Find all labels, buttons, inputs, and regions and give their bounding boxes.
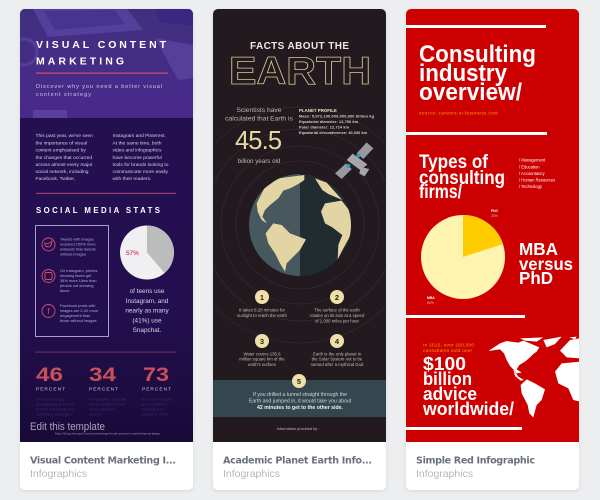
fact 5 band: 42 minutes to get to the other side. [257, 405, 343, 411]
age text: billion years old [238, 158, 281, 165]
fact 5 band: Earth and jumped in, it would take you about [249, 398, 352, 404]
stat text: twitter: without images [60, 252, 86, 256]
stat: 34 percent: PERCENT [89, 386, 118, 392]
intro text column 2: At the same time, both [112, 140, 162, 146]
stat: 46 percent [36, 364, 74, 416]
world map [488, 337, 580, 417]
fact 4: 4 [335, 337, 340, 346]
list of firm types: / Accountancy [519, 171, 545, 176]
stat text: facebook: images are 2.3X more [60, 308, 98, 313]
fact 3: million square km of the [239, 356, 285, 362]
stat: 34 percent [89, 364, 126, 416]
heading: types of consulting firms: firms/ [419, 181, 462, 203]
fact 3: earth's surface [248, 362, 277, 367]
stat text: facebook [60, 303, 98, 323]
pie chart: MBA versus PhD: 80% [427, 301, 434, 305]
pie caption: (41%) use [132, 318, 162, 324]
fact 1: sunlight to reach the earth [237, 313, 287, 318]
heading: visual content marketing: VISUAL CONTENT [36, 39, 167, 51]
heading: visual content marketing [36, 41, 166, 64]
heading: facts about the: FACTS ABOUT THE [250, 41, 349, 52]
heading: 100 billion advice worldwide: advice [423, 384, 477, 404]
heading: 100 billion advice worldwide: worldwide/ [422, 399, 514, 419]
list of firm types: / Management [519, 158, 546, 162]
fact 4: the Solar System not to be [312, 356, 363, 362]
panel: red infographic preview [406, 9, 580, 442]
planet profile: Polar diameter: 12,714 km [299, 126, 350, 130]
stat: 46 percent: PERCENT [36, 386, 65, 392]
stat: 34 percent: visual assets as their [89, 402, 126, 406]
fact 2: rotates on its axis at a speed [310, 313, 365, 318]
intro text column 1: Facebook, Twitter, [36, 176, 75, 182]
heading: types of consulting firms: Types of [419, 151, 488, 173]
icon: instagram [42, 270, 55, 282]
heading: consulting industry overview: Consulting [419, 41, 536, 68]
stat text: instagram: On Instagram, photos [60, 268, 97, 273]
subtitle: Discover why you need a better visual [36, 84, 162, 90]
planet profile: Equatorial diameter: 12,756 km [299, 120, 359, 124]
heading: social media stats: SOCIAL MEDIA STATS [36, 206, 160, 215]
intro text column 1: the changes that occurred [36, 155, 92, 161]
fact 2: of 1,000 miles per hour [315, 318, 360, 324]
stat text: instagram: showing faces get [60, 273, 92, 278]
card title: Academic Planet Earth Info... [223, 456, 372, 466]
panel: stats box [36, 226, 108, 336]
stat: 73 percent: PERCENT [142, 386, 171, 392]
intro text column 2: have become powerful [112, 155, 162, 161]
stat: 73 percent: 73 [143, 364, 169, 386]
source: source: careers-in-business.com [419, 110, 498, 116]
planet profile: Equatorial circumference: 40,030 km [299, 131, 368, 135]
heading: 100 billion advice worldwide: billion [423, 369, 472, 389]
card category: Infographics [416, 468, 473, 480]
stat: 46 percent: photography is critical [36, 402, 74, 406]
icon: facebook: f [47, 307, 50, 316]
stat text: instagram: 38% more Likes than [60, 278, 97, 283]
card title: Visual Content Marketing I... [30, 456, 176, 466]
panel: purple infographic preview [11, 9, 193, 442]
stat: 73 percent: content in 2016 [141, 412, 168, 416]
pie chart: MBA versus PhD: PhD [491, 209, 498, 213]
stat text: instagram [60, 268, 97, 293]
information credit: Information provided by : [277, 426, 319, 431]
pie chart: MBA versus PhD: 20% [491, 214, 498, 218]
stat text: twitter [60, 236, 96, 256]
fact 1: It takes 8.20 minutes for [239, 308, 285, 312]
planet profile: PLANET PROFILE [299, 108, 337, 113]
stat: 46 percent: to their marketing and [36, 406, 74, 412]
list of firm types: / Technology [519, 184, 543, 189]
heading: MBA versus PhD: versus [519, 254, 573, 274]
stat: 73 percent: aim to prioritize [141, 402, 167, 406]
intro text column 2: video and infographics [112, 148, 162, 154]
panel: dark infographic preview [213, 9, 386, 442]
pie chart: 57 percent [120, 226, 174, 280]
advice lead text: In 2015, over 200,000 [423, 342, 474, 348]
stat: 34 percent: content [89, 412, 103, 416]
fact 5 band [213, 374, 386, 417]
fact 2: The surface of the earth [314, 308, 360, 312]
card: Visual Content Marketing [11, 9, 193, 490]
intro text column 2: communicate more easily [112, 169, 169, 175]
heading: visual content marketing: MARKETING [36, 56, 124, 68]
heading: types of consulting firms: consulting [419, 167, 505, 189]
heading: MBA versus PhD [519, 239, 573, 288]
planet profile [299, 108, 375, 135]
stat: 46 percent: 46 [36, 364, 63, 386]
fact 3 [239, 334, 285, 367]
age text: calculated that Earth is [225, 116, 293, 122]
stat text: facebook: those without images [60, 318, 97, 323]
intro text column 1: content emphasised by [36, 148, 86, 154]
stat: 46 percent: consulting strategies [36, 412, 72, 416]
pie caption: of teens use [130, 288, 165, 295]
intro text column 2: Instagram and Pinterest. [112, 133, 166, 139]
edit overlay text: Edit this template [30, 421, 105, 433]
age text: Scientists have [237, 107, 282, 114]
header photo background [11, 9, 193, 118]
pie caption: Snapchat. [133, 327, 162, 334]
icon: satellite [335, 142, 373, 179]
fact 4: Earth is the only planet in [313, 352, 362, 356]
stat: 34 percent: most important [89, 406, 116, 412]
fact 3: Water covers 135.6 [243, 352, 281, 356]
stat text: instagram: photos not showing [60, 283, 94, 288]
stat: 73 percent: creating more [141, 406, 165, 412]
pie caption [125, 288, 169, 334]
pie chart: 57 percent: 57% [126, 250, 139, 257]
heading: consulting industry overview [419, 41, 536, 106]
intro text column 1: across almost every major [36, 162, 93, 168]
card category: Infographics [30, 468, 87, 480]
planet profile: Mass: 5,972,190,000,000,000 billion kg [299, 114, 375, 118]
stat text: facebook: engagement than [60, 313, 90, 318]
stat: 73 percent [141, 364, 173, 416]
subtitle: content strategy [36, 92, 91, 98]
pie chart: MBA versus PhD [421, 209, 505, 305]
intro text column 2 [112, 133, 169, 182]
source url: http://blog.hubspot.com/marketing/visual-content-marketing-strategy [55, 432, 160, 436]
heading: 100 billion advice worldwide [422, 354, 514, 419]
heading: MBA versus PhD: MBA [519, 239, 558, 259]
north america [257, 175, 304, 223]
subtitle [36, 84, 162, 98]
stat text: instagram: faces [60, 288, 69, 293]
pie chart: MBA versus PhD: MBA [427, 296, 435, 300]
intro text column 1: the importance of visual [36, 140, 87, 146]
fact 4 [311, 334, 364, 367]
age text [225, 107, 293, 165]
stat text: facebook: Facebook posts with [60, 303, 95, 308]
advice lead text [423, 342, 474, 354]
list of firm types: / Human Resources [519, 178, 555, 182]
orbit rings [213, 106, 386, 344]
stat: 46 percent: of marketers say [36, 396, 65, 402]
fact 1 [237, 290, 287, 318]
intro text column 2: tools for brands looking to [112, 162, 169, 168]
europe [315, 178, 342, 200]
list of firm types: / Education [519, 164, 540, 170]
icon: twitter [42, 238, 55, 251]
card category: Infographics [223, 468, 280, 480]
heading: MBA versus PhD: PhD [519, 268, 553, 288]
stat text: twitter: received 150% more [60, 242, 96, 246]
stat: 34 percent: of marketers recreate [89, 396, 126, 402]
heading: consulting industry overview: overview/ [419, 79, 522, 106]
card: Academic Planet Earth [212, 9, 386, 492]
fact 2: 2 [335, 293, 339, 302]
pie caption: Instagram, and [126, 298, 169, 305]
heading: types of consulting firms [419, 151, 505, 203]
card: Simple Red Infographic [406, 9, 580, 490]
stat text: twitter: Tweets with images [60, 236, 94, 242]
fact 1: 1 [260, 293, 264, 302]
heading: consulting industry overview: industry [419, 60, 508, 87]
card title: Simple Red Infographic [416, 456, 535, 466]
heading: earth outlined: EARTH [229, 50, 371, 93]
stat: 34 percent: 34 [89, 364, 116, 386]
globe [248, 173, 352, 277]
number: 45.5: 45.5 [235, 127, 282, 155]
africa [321, 201, 352, 259]
fact 4: named after a mythical God [311, 362, 364, 367]
stat text: twitter: retweets than tweets [60, 246, 96, 252]
intro text column 1: social network, including [36, 169, 89, 175]
advice lead text: consultants sold over [423, 348, 472, 354]
fact 5 band: If you drilled a tunnel straight through the [253, 392, 347, 398]
list of firm types [519, 158, 555, 189]
intro text column 2: with their readers. [112, 176, 151, 182]
intro text column 1 [36, 133, 93, 182]
heading: 100 billion advice worldwide: $100 [423, 354, 466, 374]
fact 5 band: 5 [297, 377, 301, 386]
pie caption: nearly as many [125, 308, 169, 314]
intro text column 1: This past year, we've seen [36, 133, 93, 139]
stat: 73 percent: of content creators [141, 396, 173, 402]
south america [266, 223, 306, 272]
fact 3: 3 [260, 337, 264, 346]
fact 2 [310, 290, 365, 324]
